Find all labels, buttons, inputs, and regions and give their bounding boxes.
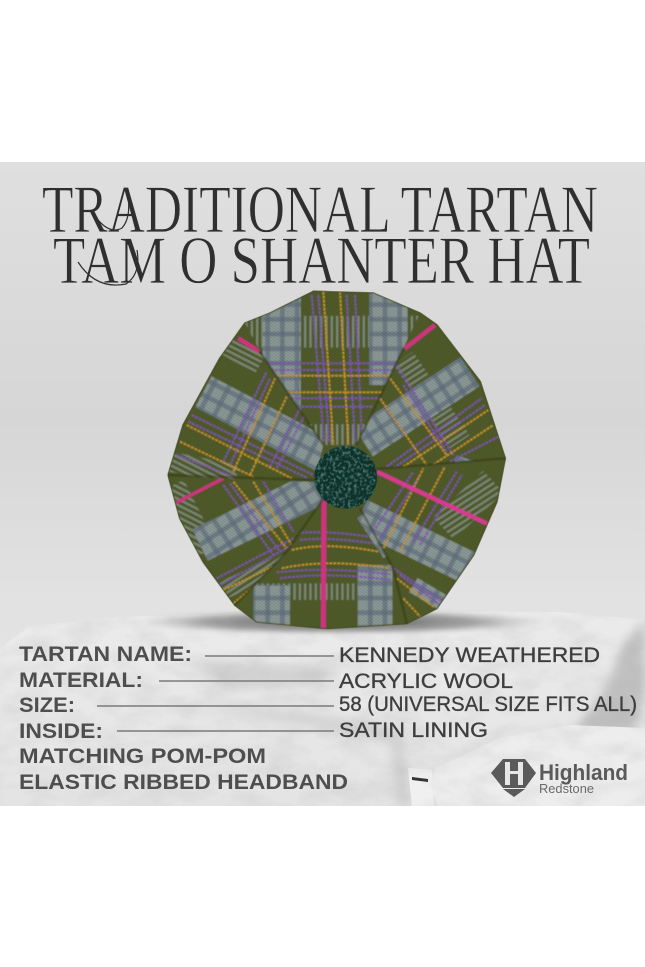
logo: Redstone [539, 781, 594, 796]
spec values: 58 (UNIVERSAL SIZE FITS ALL) [339, 693, 637, 716]
hat base [168, 292, 505, 628]
leader lines [97, 656, 334, 731]
spec labels: INSIDE: [19, 720, 103, 743]
fabric twill [168, 292, 505, 628]
rock gap [408, 768, 434, 806]
hat shadow [135, 609, 545, 635]
panel seams [168, 348, 505, 623]
title [42, 171, 598, 298]
spec values: KENNEDY WEATHERED [339, 644, 600, 667]
hat [160, 285, 510, 635]
spec values [339, 644, 637, 742]
rocks [0, 611, 645, 806]
rock shading [180, 625, 645, 806]
spec labels: MATERIAL: [19, 669, 143, 692]
spec values: SATIN LINING [339, 719, 488, 742]
spec labels [19, 643, 348, 794]
panel: lower right [361, 466, 501, 618]
background panel [0, 162, 645, 806]
panel: bottom [241, 498, 394, 629]
icon: logo mark [491, 759, 536, 797]
icon: pom-pom [314, 446, 377, 509]
panel: upper right [360, 313, 504, 468]
logo [491, 759, 628, 797]
spec labels: SIZE: [19, 694, 75, 717]
spec values: ACRYLIC WOOL [339, 670, 513, 693]
panel: lower left [170, 478, 322, 604]
panel: top [244, 291, 419, 446]
logo: Highland [539, 760, 628, 785]
spec labels: TARTAN NAME: [19, 643, 192, 666]
spec labels: MATCHING POM-POM [19, 745, 266, 768]
spec labels: ELASTIC RIBBED HEADBAND [19, 771, 348, 794]
panel: upper left [169, 324, 324, 480]
